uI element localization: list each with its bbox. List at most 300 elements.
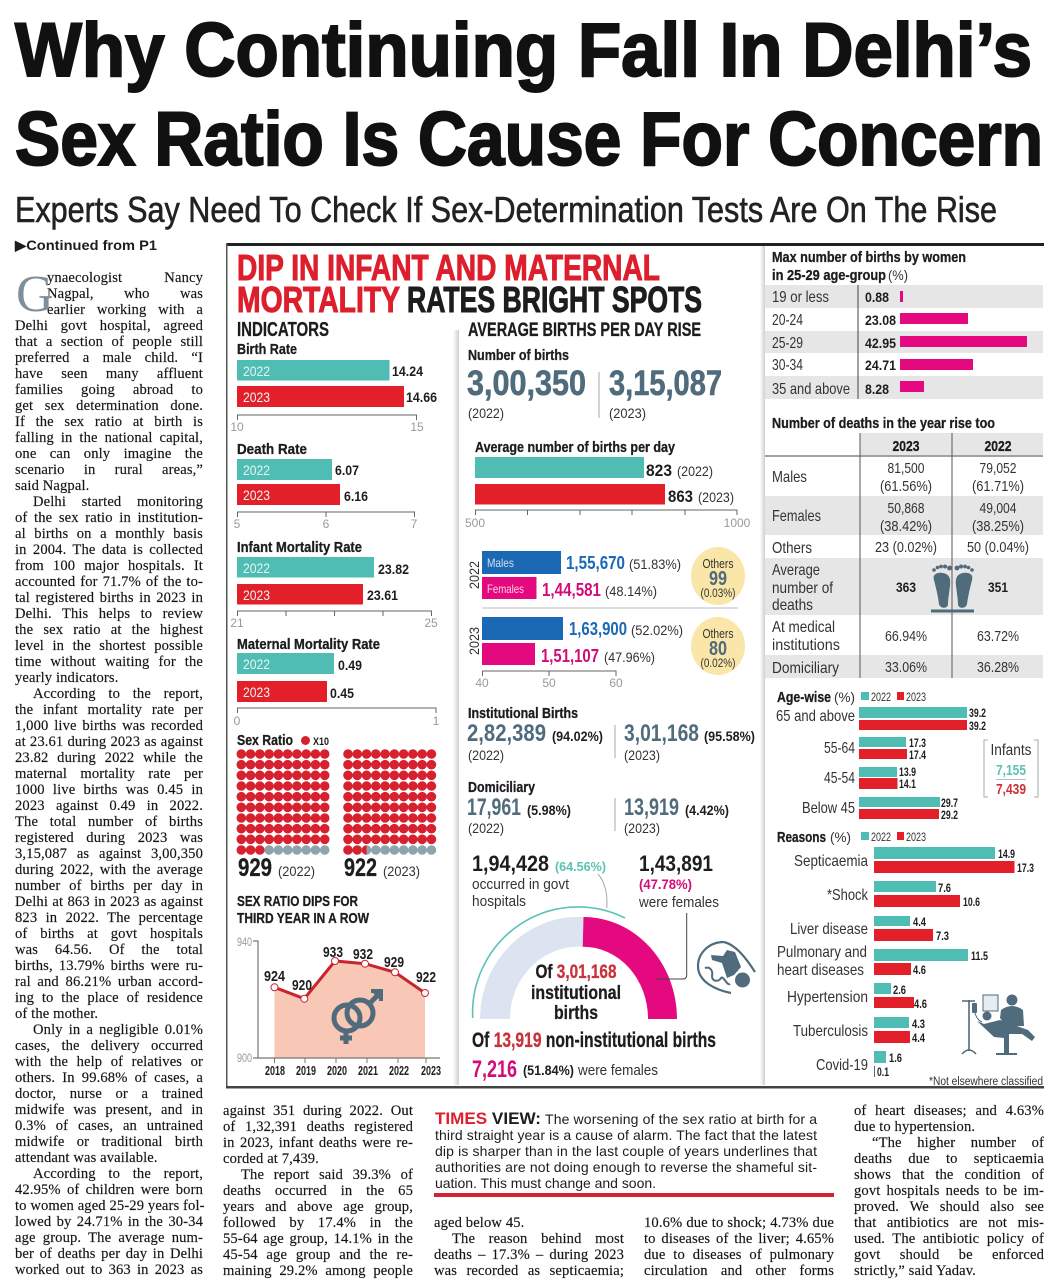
row: 2022: (51.83%) [629,556,681,572]
stat: number of births: 3,15,087 [609,364,722,403]
stat: non-institutional births: Of 13,919 non-institutional births [472,1029,716,1052]
article column 1: doctor, nurse or a trained [15,1086,203,1102]
stat: number of births: Number of births [468,347,569,364]
table: number of deaths: Others [772,540,812,557]
chart: institutional births half gauge: (47.78%) [639,876,692,892]
icon: doctor and patient with drip [962,994,1035,1055]
article column 1: Delhi at 863 in 2023 as against [15,894,203,910]
chart: institutional births half gauge: 1,94,428 [472,851,549,876]
chart: birth rate: 10 [230,420,244,434]
article column 1 [14,266,205,1278]
chart: infant mortality rate: Infant Mortality Rate [237,539,362,556]
chart: sex ratio line, 2018 to 2023: 922 [416,969,436,986]
stat: domiciliary births: (2023) [624,820,660,836]
table: number of deaths: (61.71%) [972,479,1024,495]
article column 3: was recorded as septicaemia; [434,1263,624,1279]
table: number of deaths: Males [772,469,807,486]
article column 5: proved. We should also see [854,1199,1044,1215]
table: number of deaths: 79,052 [980,461,1016,477]
row: 2022: (48.14%) [605,583,657,599]
article column 1: others. In 99.68% of cases, a [15,1070,203,1086]
article column 3: The reason behind most [452,1231,624,1247]
legend [861,690,926,704]
callout: times view: authorities are not doing enough to reverse the shameful sit- [435,1159,817,1175]
stat: institutional births: 2,82,389 [467,720,546,747]
chart: birth rate: 2023 [243,389,270,405]
table: number of deaths: 2023 [892,438,920,455]
table: number of deaths: Number of deaths in the year rise too [772,415,995,432]
chart: institutional births half gauge: occurred in govt [472,876,570,893]
article column 5: govt hospitals needs to be im- [854,1183,1044,1199]
icon: baby in womb [698,942,755,993]
chart: average births per day: 500 [465,516,485,530]
article column 1: level in the shortest possible [15,638,203,654]
article column 2: The report said 39.3% of [241,1167,413,1183]
chart: reasons for deaths: 4.4 [913,915,926,929]
panel: sex ratio dot grids [237,732,433,882]
chart: reasons for deaths: 14.9 [998,847,1015,861]
article column 2: 55-64 age group, 14.1% in the [223,1231,413,1247]
article column 5: that antibiotics are not mis- [854,1215,1044,1231]
article column 2 [223,1103,413,1279]
chart: deaths age-wise: 29.7 [941,796,958,810]
chart: reasons for deaths: 7.3 [936,929,949,943]
article column 4: circulation and other forms [644,1263,834,1279]
chart: institutional births half gauge: Of 3,01,168 [536,962,616,983]
table: number of deaths: 66.94% [885,629,927,645]
article column 4: 10.6% due to shock; 4.73% due [644,1215,834,1231]
article column 1: the infant mortality rate per [15,702,203,718]
article column 1: of the sex ratio in institution- [15,510,203,526]
stat: number of births: 3,00,350 [467,364,586,403]
chart: infant mortality rate: 25 [424,616,438,630]
chart: deaths age-wise: 29.2 [941,808,958,822]
chart: death rate: 2023 [243,487,270,503]
chart: maternal mortality rate: 2022 [243,656,270,672]
stat: domiciliary births: 17,961 [467,794,521,821]
chart: death rate: 6.07 [335,462,359,478]
dot grid: 929: (2022) [278,863,315,879]
callout: times view: The worsening of the sex ratio at birth for a [545,1111,817,1127]
chart: deaths age-wise: 45-54 [824,770,855,787]
article column 1: 823 in 2022. The percentage [15,910,203,926]
chart: deaths age-wise: 55-64 [824,740,855,757]
stat: non-institutional births: were females [577,1063,658,1079]
row: 2023: 1,63,900 [569,619,627,639]
article column 1: 1000 live births was 0.45 in [15,782,203,798]
row: 2022: Males [487,556,514,570]
stat: institutional births: Institutional Births [468,705,578,722]
chart: average births per day: 1000 [724,516,751,530]
chart: births by gender: 60 [609,676,623,690]
table: number of deaths: 351 [988,579,1008,595]
chart: sex ratio line, 2018 to 2023: 2022 [389,1064,409,1078]
row: 2023 [466,617,745,675]
stat: institutional births: (2022) [468,747,504,763]
article column 1: to women aged 25-29 years fol- [15,1198,205,1214]
article column 1: al births on a monthly basis [15,526,203,542]
chart: deaths age-wise: 17.4 [909,748,926,762]
badge: others 2023 [691,617,745,675]
chart: institutional births half gauge: (64.56%) [555,859,606,874]
chart: sex ratio line, 2018 to 2023: 2019 [296,1064,316,1078]
chart: reasons for deaths: *Shock [827,887,869,904]
stat: institutional births: (94.02%) [552,728,603,744]
article column 1: of births at govt hospitals [15,926,203,942]
chart: births by gender: 40 [475,676,489,690]
chart: maternal mortality rate: Maternal Mortality Rate [237,636,380,653]
panel: sex ratio dot grids: X10 [313,736,329,748]
chart: infant mortality rate: 2023 [243,587,270,603]
continued from page 1 marker: ▶Continued from P1 [14,237,157,253]
chart: average births per day: Average number of births per day [475,439,676,456]
chart: sex ratio line, 2018 to 2023: 2023 [421,1064,441,1078]
article column 5: due to hypertension. [854,1119,975,1135]
table: number of deaths: 23 (0.02%) [875,540,937,556]
stat: number of births: (2023) [609,405,646,421]
chart: births by age group of mother: 35 and above [772,381,850,398]
chart: deaths age-wise: 13.9 [899,765,916,779]
article column 1: worked out to 363 in 2023 as [15,1262,203,1278]
article column 1: registered during 2023 was [15,830,203,846]
row: 2023: (52.02%) [631,622,683,638]
article column 1: from 100 major hospitals. It [15,558,203,574]
article column 1: If the sex ratio at birth is [15,414,203,430]
article column 5: shows that the condition of [854,1167,1044,1183]
chart: infant mortality rate: 2022 [243,560,270,576]
panel: indicators [230,319,440,728]
table: number of deaths: (38.42%) [880,519,932,535]
article column 1: ynaecologist Nancy [47,270,203,286]
chart: births by age group of mother: 25-29 [772,335,803,352]
table: number of deaths: 50 (0.04%) [967,540,1029,556]
chart: birth rate: 14.66 [406,389,437,405]
article column 1: Delhi started monitoring [33,494,203,510]
chart: reasons for deaths: 10.6 [963,895,980,909]
chart: institutional births half gauge: hospitals [472,893,526,910]
article column 1: The total number of births [15,814,203,830]
chart: death rate: 2022 [243,462,270,478]
article column 5 [854,1103,1044,1279]
article column 1: attendant was available. [15,1150,158,1166]
chart: births by age group of mother [765,249,1043,399]
chart: deaths age-wise: 65 and above [776,708,855,725]
article column 1: accounted for 71.7% of the to- [15,574,203,590]
article column 1: of the mother. [15,1006,98,1022]
article column 1: cases, the delivery occurred [15,1038,203,1054]
chart: birth rate: 15 [410,420,424,434]
chart: maternal mortality rate: 0 [234,714,241,728]
article column 1: one can only imagine the [15,446,203,462]
callout: times view: third straight year is a cause of alarm. The fact that the latest [435,1127,817,1143]
callout: times view: dip is sharper than in the last couple of years underlines that [435,1143,817,1159]
article column 1: Only in a negligible 0.01% [33,1022,203,1038]
row: 2023: 2023 [466,627,482,655]
table: number of deaths: institutions [772,637,840,654]
panel heading: MORTALITY [237,279,400,320]
chart: institutional births half gauge: births [554,1003,598,1024]
article column 3 [434,1215,624,1279]
drop cap: G [16,266,54,323]
chart: average births per day: 863 [668,487,693,506]
chart: maternal mortality rate: 0.49 [338,657,362,673]
table: number of deaths: deaths [772,597,813,614]
row: 2022: 1,55,670 [566,553,625,573]
article column 1: with the help of relatives or [15,1054,203,1070]
article column 1: during 2022, with the average [15,862,203,878]
chart: infant mortality rate [230,539,438,630]
stat: domiciliary births [467,779,729,836]
stat: number of births [467,347,722,421]
chart: death rate: 6 [323,517,330,531]
chart: deaths age-wise [776,689,986,822]
chart: sex ratio line, 2018 to 2023: THIRD YEAR IN A ROW [237,910,370,927]
chart: deaths age-wise: 39.2 [969,719,986,733]
chart: death rate: Death Rate [237,441,307,458]
chart: deaths age-wise: 39.2 [969,706,986,720]
article column 1: 1,000 live births was recorded [15,718,203,734]
article column 1: was 64.56. Of the total [15,942,203,958]
chart: sex ratio line, 2018 to 2023: 900 [237,1051,252,1065]
legend: 2023 [906,830,926,844]
icon: feet on a scale [931,564,974,612]
chart: births by age group of mother: 0.88 [865,289,889,305]
chart: death rate: 7 [411,517,418,531]
chart: average births per day: (2022) [677,463,713,479]
article column 1: midwife was present, and in [15,1102,203,1118]
table: number of deaths: Females [772,508,821,525]
article column 2: in 2023, infant deaths were re- [223,1135,413,1151]
stat: institutional births [467,705,755,763]
chart: maternal mortality rate: 0.45 [330,685,354,701]
panel heading: DIP IN INFANT AND MATERNAL [237,247,660,288]
table: number of deaths: 81,500 [888,461,924,477]
chart: sex ratio line, 2018 to 2023: 2021 [358,1064,378,1078]
chart: births by age group of mother: 30-34 [772,357,803,374]
article column 5: used. The antibiotic policy of [854,1231,1044,1247]
chart: birth rate: Birth Rate [237,341,297,358]
dot grid: 929 [238,754,326,882]
stat: non-institutional births [472,1029,716,1083]
chart: birth rate: 2022 [243,363,270,379]
heading: average births per day rise: AVERAGE BIRTHS PER DAY RISE [468,320,701,341]
chart: infant mortality rate: 23.61 [367,587,398,603]
chart: reasons for deaths: 7.6 [938,881,951,895]
chart: sex ratio line, 2018 to 2023: SEX RATIO DIPS FOR [237,893,358,910]
article column 1: families going abroad to [15,382,203,398]
row: 2023: (47.96%) [604,649,655,665]
chart: births by gender: 50 [542,676,556,690]
chart: reasons for deaths: 17.3 [1017,861,1034,875]
article column 1: ber of deaths per day in Delhi [15,1246,203,1262]
article column 1: maternal mortality rate per [15,766,203,782]
table: number of deaths [765,415,1043,678]
callout: times view: uation. This must change and soon. [435,1175,656,1191]
chart: reasons for deaths [777,829,1043,1088]
callout: times view [434,1109,834,1197]
panel heading [237,247,702,320]
table: number of deaths: 33.06% [885,660,927,676]
article column 4 [644,1215,834,1279]
chart: institutional births half gauge: were females [638,894,719,911]
stat: number of births: (2022) [468,405,504,421]
chart: sex ratio line, 2018 to 2023: 933 [323,944,343,961]
badge: others 2022: (0.03%) [700,588,736,600]
article column 2: maining 29.2% among people [223,1263,413,1279]
row: 2022: Females [487,582,524,596]
article column 1: that a section of people still [15,334,203,350]
chart: institutional births half gauge: 1,43,891 [639,851,713,876]
badge: others 2022 [691,547,745,605]
article column 3: aged below 45. [434,1215,524,1231]
article column 1: at 23.61 during 2023 as against [15,734,203,750]
table: number of deaths: number of [772,580,833,597]
chart: sex ratio line, 2018 to 2023 [237,893,441,1078]
legend: 2023 [906,690,926,704]
chart: births by age group of mother: 24.71 [865,357,896,373]
chart: births by age group of mother: 8.28 [865,381,889,397]
stat: non-institutional births: 7,216 [472,1056,517,1083]
stat: institutional births: (2023) [624,747,660,763]
article column 1: 0.3% of cases, an untrained [15,1118,203,1134]
article column 1: earlier working with a [47,302,203,318]
chart: birth rate: 14.24 [392,363,423,379]
chart: reasons for deaths: 4.6 [913,963,926,977]
chart: deaths age-wise: 17.3 [909,736,926,750]
article column 3: deaths – 17.3% – during 2023 [434,1247,624,1263]
chart: birth rate [230,341,437,434]
chart: sex ratio line, 2018 to 2023: 2018 [265,1064,285,1078]
article column 1: Delhi govt hospital, agreed [15,318,203,334]
article column 1: ing to the place of residence [15,990,203,1006]
table: number of deaths: Domiciliary [772,660,839,677]
dot grid: 929: 929 [238,854,272,882]
article column 1: midwife or traditional birth [15,1134,203,1150]
table: number of deaths: 36.28% [977,660,1019,676]
chart: reasons for deaths: Covid-19 [816,1057,868,1074]
chart: average births per day: (2023) [698,489,734,505]
table: number of deaths: Average [772,562,820,579]
row: 2022: 1,44,581 [542,580,601,600]
chart: births by age group of mother: (%) [888,267,908,283]
stat: domiciliary births: Domiciliary [468,779,536,796]
chart: reasons for deaths: 4.4 [912,1031,925,1045]
article column 2: against 351 during 2022. Out [223,1103,413,1119]
stat: institutional births: (95.58%) [704,728,755,744]
article column 1: get sex determination done. [15,398,203,414]
table: number of deaths: (61.56%) [880,479,932,495]
article column 1: 23.82 during 2022 while the [15,750,203,766]
chart: sex ratio line, 2018 to 2023: 929 [384,954,404,971]
row: 2022: 2022 [466,561,482,589]
badge: others 2022: Others [702,556,734,571]
chart: births by gender [466,547,745,690]
article column 5: strictly,” said Yadav. [854,1263,976,1279]
chart: births by age group of mother: 23.08 [865,312,896,328]
stat: domiciliary births: (5.98%) [527,802,571,818]
callout: times view: TIMES VIEW: [435,1109,541,1128]
chart: deaths age-wise: 14.1 [899,777,916,791]
article column 2: followed by 17.4% in the [223,1215,413,1231]
callout: infants: 7,439 [996,781,1026,798]
legend: 2022 [871,830,891,844]
chart: reasons for deaths: *Not elsewhere classified [929,1076,1043,1088]
dot grid: 922 [344,754,433,882]
article column 1: in 2004. The data is collected [15,542,203,558]
chart: death rate: 5 [234,517,241,531]
stat: domiciliary births: 13,919 [624,794,679,821]
article column 1: births, 13.79% births were ru- [15,958,203,974]
chart: sex ratio line, 2018 to 2023: 920 [292,977,312,994]
chart: reasons for deaths: 1.6 [889,1051,902,1065]
callout: infants: Infants [990,742,1032,759]
table: number of deaths: 363 [896,579,916,595]
table: number of deaths: 2022 [984,438,1012,455]
chart: infant mortality rate: 21 [230,616,244,630]
dot grid: 922: (2023) [383,863,420,879]
article column 2: corded at 7,439. [223,1151,319,1167]
chart: reasons for deaths: 2.6 [893,983,906,997]
table: number of deaths: 63.72% [977,629,1019,645]
indicators heading: INDICATORS [237,319,329,341]
chart: births by age group of mother: 42.95 [865,335,896,351]
chart: reasons for deaths: 4.3 [912,1017,925,1031]
chart: institutional births half gauge [472,851,755,1024]
chart: reasons for deaths: Hypertension [787,989,868,1006]
article column 1: preferred a male child. “I [15,350,203,366]
chart: births by age group of mother: 19 or less [772,289,829,306]
badge: others 2022: 99 [709,568,727,590]
article column 1: tal registered births in 2023 in [15,590,203,606]
chart: reasons for deaths: heart diseases [777,962,864,979]
table: number of deaths: 49,004 [980,501,1016,517]
article column 1: time without waiting for the [15,654,203,670]
chart: reasons for deaths: 11.5 [971,949,988,963]
table: number of deaths: At medical [772,619,835,636]
chart: maternal mortality rate: 2023 [243,684,270,700]
chart: births by age group of mother: Max number of births by women [772,249,966,266]
article column 1: have seen many affluent [15,366,203,382]
chart: average births per day: 823 [646,461,672,480]
table: number of deaths: (38.25%) [972,519,1024,535]
article column 1: number of births per day in [15,878,203,894]
article column 1: ral and 86.21% urban accord- [15,974,203,990]
legend [861,830,926,844]
legend: 2022 [871,690,891,704]
chart: reasons for deaths: Liver disease [790,921,868,938]
panel heading: RATES BRIGHT SPOTS [407,279,702,320]
chart: maternal mortality rate [234,636,440,728]
article column 5: deaths due to septicaemia [854,1151,1044,1167]
panel: infographic frame [226,243,1044,1088]
title [15,8,1043,182]
chart: average births per day [465,439,751,530]
chart: reasons for deaths: 0.1 [877,1065,889,1079]
chart: death rate: 6.16 [344,488,368,504]
article column 1: According to the report, [33,1166,203,1182]
chart: sex ratio line, 2018 to 2023: 924 [264,968,286,985]
chart: reasons for deaths: Reasons [777,829,826,846]
article column 4: to diseases of the liver; 4.65% [644,1231,834,1247]
row: 2023: 1,51,107 [541,646,599,666]
chart: deaths age-wise: (%) [834,689,855,705]
article column 1: said Nagpal. [15,478,89,494]
chart: sex ratio line, 2018 to 2023: 2020 [327,1064,347,1078]
article column 2: years and above age group, [223,1199,413,1215]
article column 1: yearly indicators. [15,670,118,686]
chart: reasons for deaths: 4.6 [914,997,927,1011]
article column 5: of heart diseases; and 4.63% [854,1103,1044,1119]
